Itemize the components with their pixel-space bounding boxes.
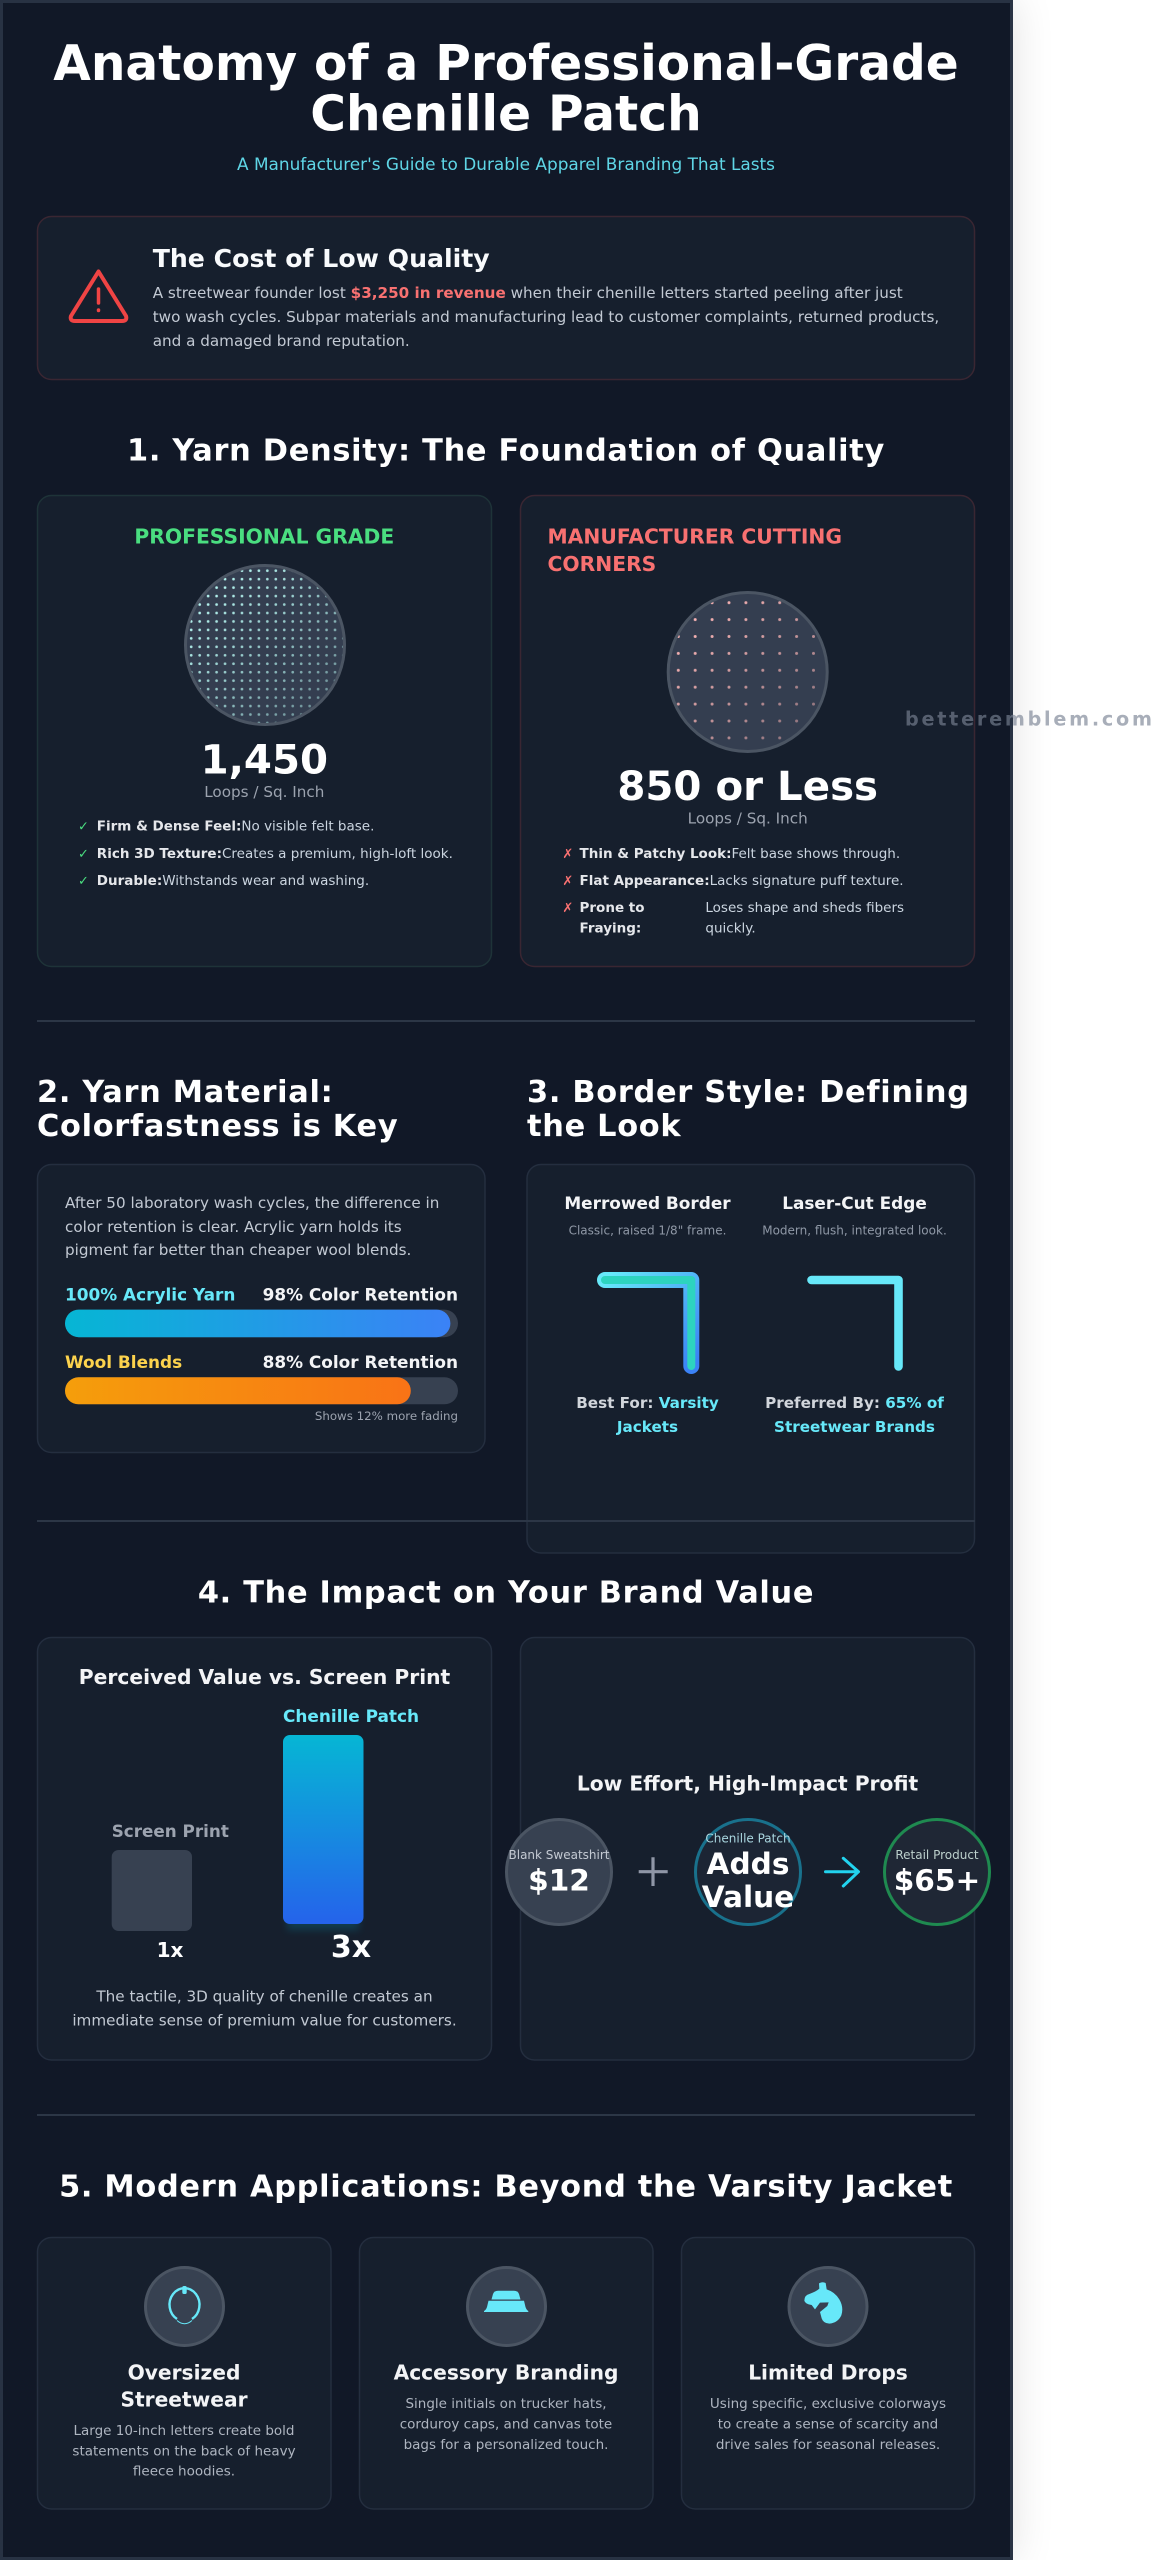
panel: yarn material: [38, 1164, 485, 1452]
heading: section 1: 1. Yarn Density: The Foundation of Quality: [127, 434, 885, 469]
card title: Accessory Branding: [394, 2360, 618, 2384]
panel: limited drops: [682, 2238, 974, 2509]
bar: acrylic yarn 98%: 98% Color Retention: [263, 1285, 458, 1305]
list: low quality drawbacks: Flat Appearance:Lacks signature puff texture.: [580, 873, 904, 889]
heading: section 2: 2. Yarn Material:: [37, 1075, 333, 1110]
text: wash cycle intro: After 50 laboratory wash cycles, the difference in: [65, 1194, 439, 1212]
text: alert body: two wash cycles. Subpar materials and manufacturing lead to customer complaints, returned products,: [153, 308, 939, 326]
icon: hoodie neck: [146, 2268, 224, 2346]
circle: chenille patch adds value: Value: [702, 1880, 794, 1914]
title: [53, 36, 959, 143]
note: more fading: Shows 12% more fading: [315, 1409, 458, 1423]
label: manufacturer cutting corners: CORNERS: [548, 552, 656, 576]
panel: manufacturer cutting corners: [520, 496, 974, 966]
circle: retail product $65+: Retail Product: [895, 1848, 979, 1862]
icon: hat: [468, 2268, 546, 2346]
circle: chenille patch adds value: [696, 1820, 800, 1924]
circle: retail product $65+: $65+: [894, 1864, 980, 1898]
heading: section 4: 4. The Impact on Your Brand Value: [198, 1576, 814, 1610]
list: low quality drawbacks: Thin & Patchy Look:Felt base shows through.: [580, 846, 900, 862]
watermark: betteremblem.com: [905, 708, 1155, 731]
bar: acrylic yarn 98%: 100% Acrylic Yarn: [65, 1285, 235, 1305]
bar: chenille patch 3x: 3x: [331, 1930, 371, 1965]
title: Anatomy of a Professional-Grade: [53, 36, 959, 92]
list: low quality drawbacks: ✗: [562, 847, 573, 862]
text: wash cycle intro: pigment far better than cheaper wool blends.: [65, 1241, 411, 1259]
list: low quality drawbacks: [562, 846, 904, 936]
card text: to create a sense of scarcity and: [718, 2417, 938, 2433]
card title: Streetwear: [120, 2388, 248, 2412]
card text: statements on the back of heavy: [72, 2443, 296, 2459]
bar: wool blends 88%: [65, 1352, 458, 1404]
card text: corduroy caps, and canvas tote: [400, 2417, 612, 2433]
column: merrowed border: [564, 1193, 731, 1436]
card title: Oversized: [128, 2360, 240, 2384]
stat: 1,450 loops: 1,450: [201, 737, 328, 784]
card text: drive sales for seasonal releases.: [716, 2437, 940, 2453]
list: professional benefits: ✓: [78, 847, 89, 862]
circle: chenille patch adds value: Adds: [707, 1847, 789, 1881]
circle: chenille patch adds value: Chenille Patch: [705, 1832, 791, 1846]
list: low quality drawbacks: ✗: [562, 874, 573, 889]
bar: screen print 1x: 1x: [157, 1938, 184, 1962]
diagram: merrowed corner: [605, 1280, 691, 1366]
chart heading: Perceived Value vs. Screen Print: [79, 1665, 451, 1689]
card text: Single initials on trucker hats,: [405, 2396, 607, 2412]
bar: screen print 1x: [112, 1821, 229, 1962]
column: merrowed border: Jackets: [616, 1418, 678, 1436]
column: laser-cut edge: Preferred By: 65% of: [765, 1394, 944, 1412]
caption: The tactile, 3D quality of chenille creates an: [95, 1988, 433, 2006]
column: merrowed border: Classic, raised 1/8" frame.: [569, 1224, 726, 1238]
heading: section 3: the Look: [527, 1109, 681, 1144]
list: professional benefits: Durable:Withstands wear and washing.: [97, 873, 369, 889]
subtitle: A Manufacturer's Guide to Durable Apparel Branding That Lasts: [237, 154, 775, 174]
stat: 850 or less loops: Loops / Sq. Inch: [688, 810, 808, 828]
bar: wool blends 88%: Wool Blends: [65, 1352, 182, 1372]
column: laser-cut edge: Laser-Cut Edge: [782, 1193, 927, 1213]
caption: immediate sense of premium value for customers.: [72, 2012, 457, 2030]
panel: perceived value chart: [38, 1638, 492, 2060]
panel: accessory branding: [360, 2238, 653, 2509]
column: merrowed border: Best For: Varsity: [576, 1394, 719, 1412]
card text: Using specific, exclusive colorways: [710, 2396, 946, 2412]
circle: blank sweatshirt $12: Blank Sweatshirt: [508, 1848, 610, 1862]
list: professional benefits: ✓: [78, 874, 89, 889]
column: laser-cut edge: Streetwear Brands: [774, 1418, 935, 1436]
panel: oversized streetwear: [38, 2238, 331, 2509]
icon: plus: [639, 1857, 668, 1886]
list: low quality drawbacks: Fraying:: [580, 920, 641, 936]
column: merrowed border: Merrowed Border: [564, 1193, 731, 1213]
text: alert body: and a damaged brand reputation.: [153, 332, 410, 350]
column: laser-cut edge: [762, 1193, 947, 1436]
list: low quality drawbacks: quickly.: [705, 920, 756, 936]
panel: professional grade: [38, 496, 492, 966]
label: professional grade: PROFESSIONAL GRADE: [134, 525, 394, 549]
card text: fleece hoodies.: [133, 2464, 235, 2480]
bar: acrylic yarn 98%: [65, 1285, 458, 1337]
heading: section 3: 3. Border Style: Defining: [527, 1075, 970, 1110]
diagram: dense loops circle: [186, 566, 344, 724]
label: manufacturer cutting corners: MANUFACTURER CUTTING: [548, 525, 842, 549]
bar: chenille patch 3x: Chenille Patch: [283, 1706, 419, 1726]
heading: section 5: 5. Modern Applications: Beyond the Varsity Jacket: [59, 2170, 953, 2205]
heading: profit: Low Effort, High-Impact Profit: [577, 1772, 918, 1796]
stat: 1,450 loops: Loops / Sq. Inch: [204, 783, 324, 801]
list: low quality drawbacks: Prone to: [580, 900, 645, 916]
list: low quality drawbacks: ✗: [562, 901, 573, 916]
card text: Large 10-inch letters create bold: [73, 2423, 295, 2439]
circle: blank sweatshirt $12: $12: [528, 1864, 590, 1898]
column: laser-cut edge: Modern, flush, integrated look.: [762, 1224, 947, 1238]
diagram: sparse loops circle: [668, 592, 827, 752]
panel: the cost of low quality: [38, 216, 974, 380]
arrow: [826, 1858, 858, 1886]
stat: 850 or less loops: 850 or Less: [617, 763, 878, 810]
bar: wool blends 88%: 88% Color Retention: [263, 1352, 458, 1372]
list: low quality drawbacks: Loses shape and sheds fibers: [705, 900, 904, 916]
list: professional benefits: [78, 819, 453, 889]
card text: bags for a personalized touch.: [404, 2437, 608, 2453]
title: Chenille Patch: [310, 87, 702, 143]
icon: warning triangle: [71, 272, 126, 321]
list: professional benefits: Firm & Dense Feel:No visible felt base.: [97, 819, 374, 835]
text: alert body: A streetwear founder lost $3,250 in revenue when their chenille letters started peeling after just: [153, 284, 903, 302]
text: wash cycle intro: color retention is clear. Acrylic yarn holds its: [65, 1218, 402, 1236]
diagram: laser-cut corner: [812, 1280, 898, 1366]
card title: Limited Drops: [748, 2360, 908, 2384]
heading: the cost of low quality: The Cost of Low Quality: [153, 244, 490, 273]
panel: border style: [527, 1164, 974, 1553]
list: professional benefits: Rich 3D Texture:Creates a premium, high-loft look.: [97, 846, 453, 862]
list: professional benefits: ✓: [78, 820, 89, 835]
heading: section 2: Colorfastness is Key: [37, 1109, 398, 1144]
icon: swirl blob: [789, 2268, 867, 2346]
circle: blank sweatshirt $12: [506, 1820, 612, 1924]
bar: screen print 1x: Screen Print: [112, 1821, 229, 1841]
panel: low effort profit: [506, 1638, 990, 2060]
circle: retail product $65+: [884, 1820, 990, 1924]
bar: chenille patch 3x: [283, 1706, 419, 1965]
